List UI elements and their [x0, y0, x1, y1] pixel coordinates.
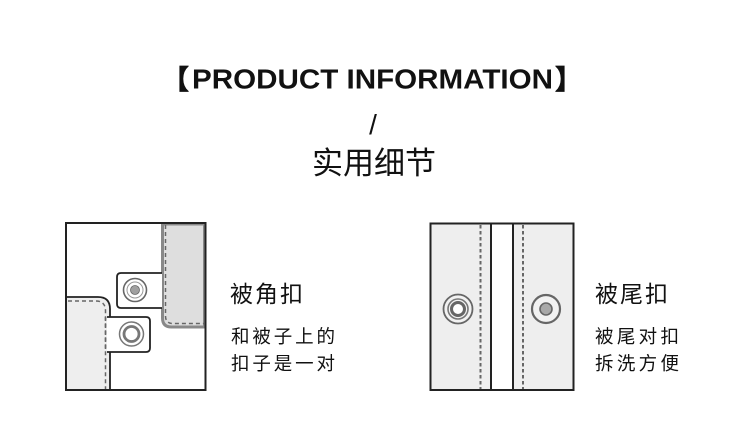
icon: tail buckle diagram — [430, 223, 574, 390]
upper right quilt panel — [162, 224, 204, 327]
icon: corner buckle diagram — [66, 223, 206, 390]
label: corner buckle: 被角扣 — [230, 281, 303, 307]
right snap — [532, 295, 560, 323]
description: corner buckle — [231, 326, 335, 374]
description: tail buckle — [595, 326, 679, 374]
stitching lines — [480, 225, 523, 389]
description: corner buckle: 扣子是一对 — [231, 353, 335, 374]
lower tab with snap — [106, 317, 150, 352]
fabric panels — [431, 224, 573, 389]
description: tail buckle: 拆洗方便 — [595, 353, 679, 374]
description: tail buckle: 被尾对扣 — [595, 326, 679, 347]
label: tail buckle: 被尾扣 — [595, 281, 668, 307]
slash divider: / — [369, 109, 377, 140]
lower left quilt panel — [67, 297, 110, 389]
title heading: PRODUCT INFORMATION — [192, 64, 553, 94]
title heading: 【 — [162, 65, 189, 95]
title heading: 】 — [555, 65, 582, 95]
description: corner buckle: 和被子上的 — [231, 326, 335, 347]
subtitle: 实用细节 — [312, 146, 436, 181]
left snap — [444, 294, 472, 324]
upper tab with snap — [117, 273, 162, 308]
